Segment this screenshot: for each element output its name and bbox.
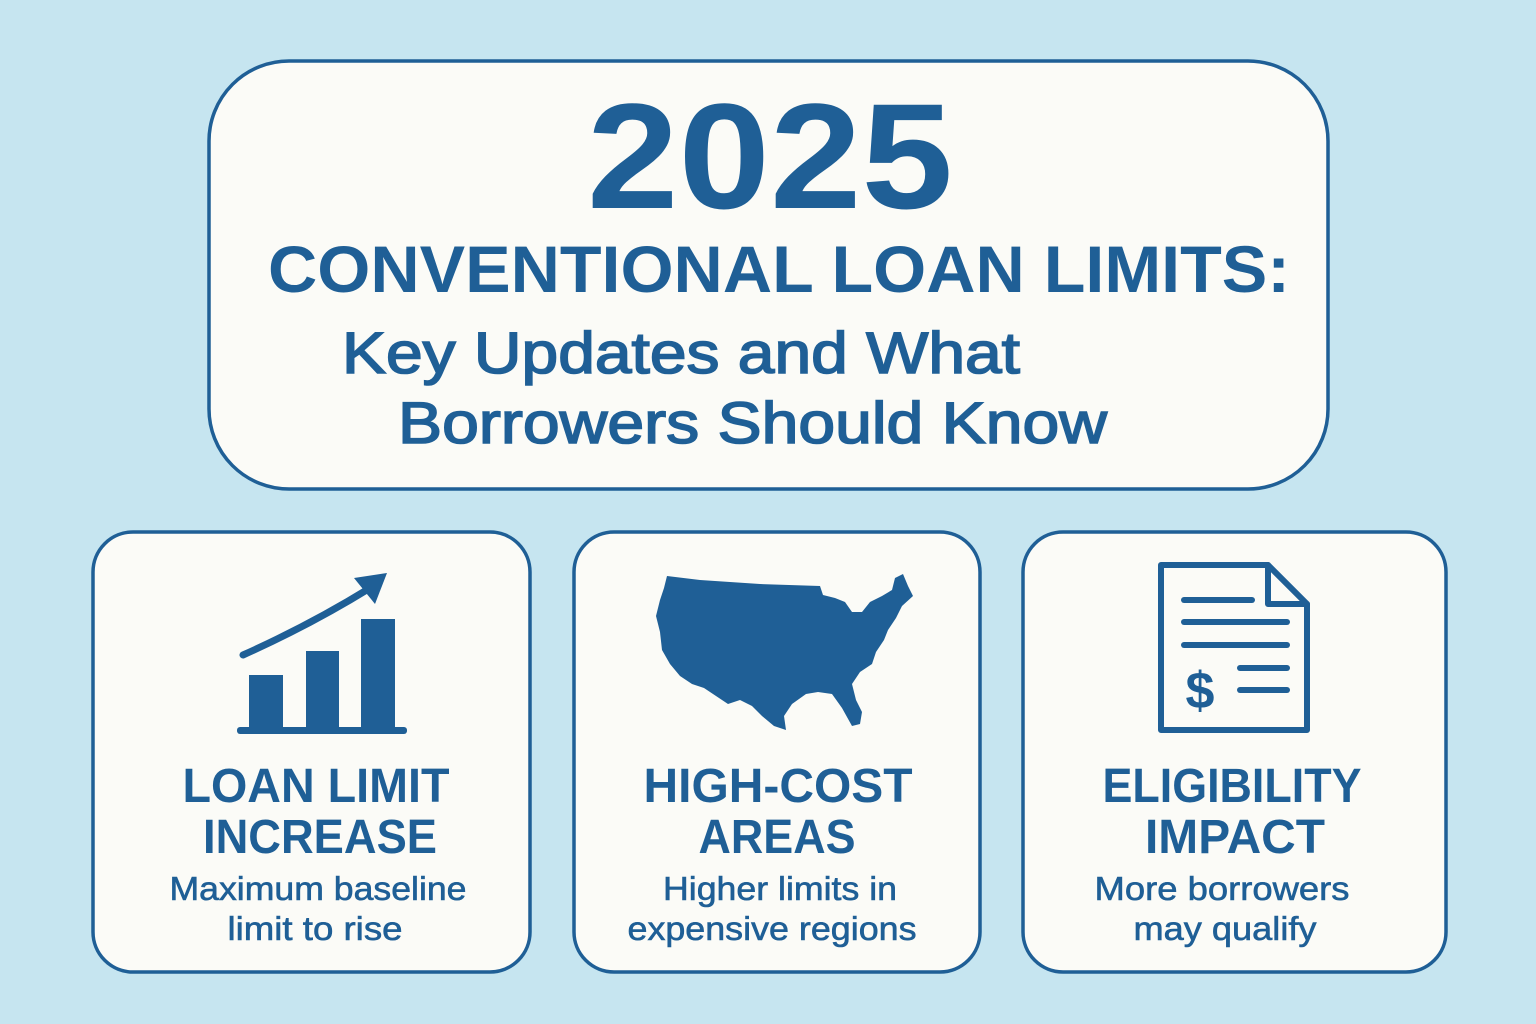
icon: bar chart with arrow [237, 573, 407, 734]
panel: high-cost areas [574, 532, 980, 972]
text: description: Higher limits in [663, 870, 897, 907]
panel: loan limit increase [93, 532, 530, 972]
subtitle: Borrowers Should Know [398, 391, 1108, 456]
heading: loan limit increase: LOAN LIMIT [182, 760, 450, 813]
icon: US map [656, 574, 913, 730]
title: main heading: CONVENTIONAL LOAN LIMITS: [268, 232, 1290, 306]
icon: document with dollar [1161, 565, 1307, 730]
text: description [628, 870, 916, 947]
icon: dollar sign: $ [1186, 662, 1215, 720]
heading: high-cost areas [644, 760, 912, 864]
text: description: may qualify [1134, 910, 1317, 947]
subtitle: Key Updates and What [342, 321, 1020, 386]
heading: loan limit increase: INCREASE [203, 811, 437, 864]
text: description: Maximum baseline [170, 870, 466, 907]
text: description: More borrowers [1094, 870, 1350, 907]
subtitle [342, 321, 1108, 456]
text: description [1094, 870, 1350, 947]
heading: high-cost areas: HIGH-COST [644, 760, 912, 813]
panel: title [209, 61, 1328, 489]
text: description: expensive regions [628, 910, 916, 947]
heading: eligibility impact [1102, 760, 1362, 864]
heading: eligibility impact: IMPACT [1145, 811, 1325, 864]
panel: eligibility impact [1023, 532, 1446, 972]
heading: eligibility impact: ELIGIBILITY [1102, 760, 1362, 813]
title: year: 2025 [587, 72, 953, 240]
heading: loan limit increase [182, 760, 450, 864]
text: description [170, 870, 466, 947]
text: description: limit to rise [228, 910, 402, 947]
heading: high-cost areas: AREAS [698, 811, 856, 864]
